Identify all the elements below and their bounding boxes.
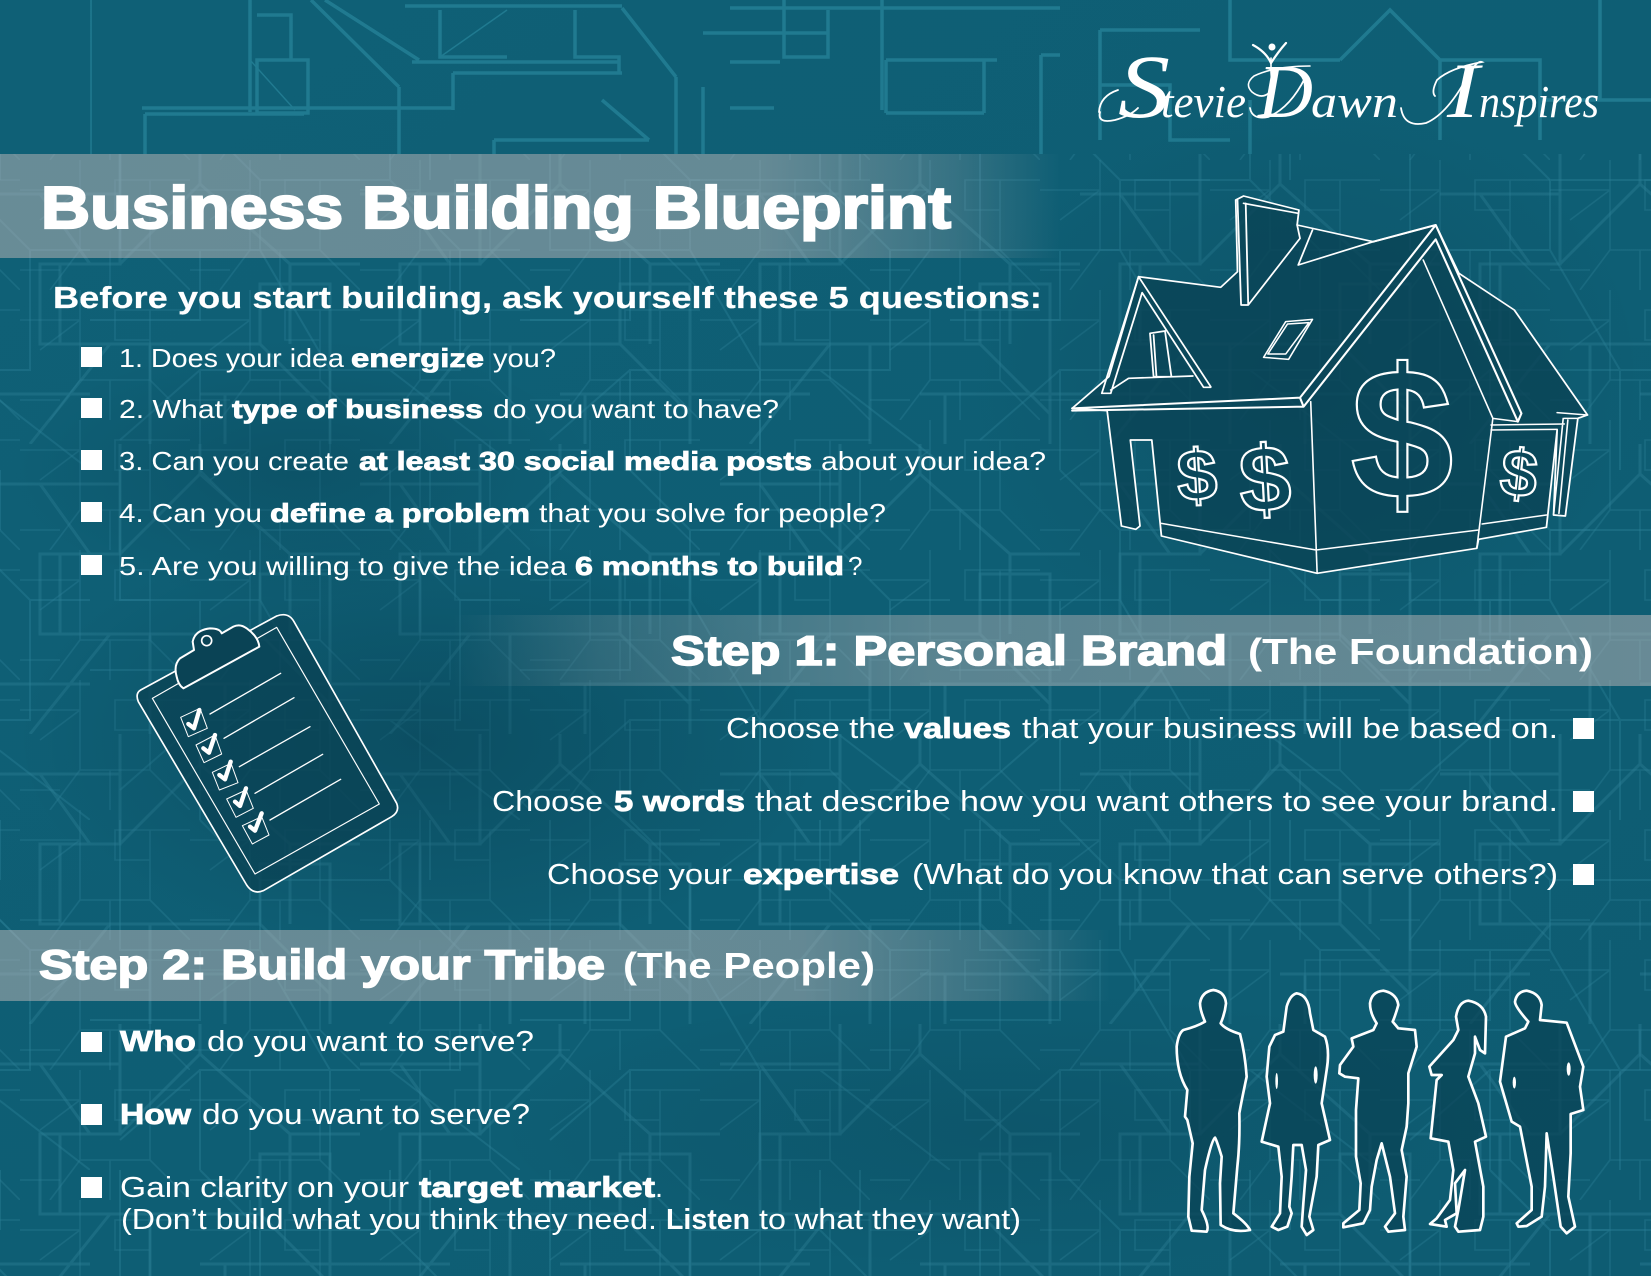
step 2 item: target market: to what they want) xyxy=(759,1204,1021,1236)
step 1 item: 5 words: Choose xyxy=(492,786,603,818)
question 1: you? xyxy=(493,343,556,373)
step 2 item: target market: target market xyxy=(419,1172,655,1204)
step 2 item: how: How xyxy=(120,1099,192,1131)
decorative logo swashes xyxy=(1099,62,1482,124)
step 2 item: who xyxy=(81,1026,534,1058)
step 1 item: expertise: Choose your xyxy=(547,859,732,891)
subheading: five questions: Before you start building, ask yourself these 5 questions: xyxy=(53,280,1042,315)
question 5: 5. Are you willing to give the idea xyxy=(119,551,568,581)
title: Business Building Blueprint xyxy=(41,175,951,241)
logo: Stevie Dawn Inspires xyxy=(1099,38,1599,137)
icon: clipboard checklist xyxy=(137,615,398,892)
step 2 band xyxy=(0,930,1110,1001)
question 5: ? xyxy=(848,551,862,581)
step 1 item: values xyxy=(726,713,1594,745)
step 1 item: values: that your business will be based on. xyxy=(1022,713,1558,745)
icon: large dollar sign: $ xyxy=(1350,331,1454,538)
question 1 xyxy=(81,343,556,373)
step 2 item: target market: . xyxy=(655,1172,663,1204)
step 1 item: values: Choose the xyxy=(726,713,895,745)
title band xyxy=(0,154,1060,258)
step 1 item: 5 words xyxy=(492,786,1594,818)
question 3: 3. Can you create xyxy=(119,446,349,476)
step 2 item: who: do you want to serve? xyxy=(207,1026,534,1058)
person 2 xyxy=(1262,993,1330,1235)
step 1 heading: Step 1: Personal Brand xyxy=(671,627,1227,674)
step 2 item: target market: Listen xyxy=(666,1204,750,1236)
step 2 item: who: Who xyxy=(120,1026,196,1058)
step 2 item: how xyxy=(81,1099,530,1131)
step 1 item: 5 words: that describe how you want others to see your brand. xyxy=(755,786,1558,818)
icon: dollar sign middle: $ xyxy=(1236,426,1294,532)
question 4: 4. Can you xyxy=(119,498,262,528)
question 2: do you want to have? xyxy=(493,394,779,424)
logo: Stevie Dawn Inspires: tevie xyxy=(1161,76,1246,127)
step 2 item: target market: Gain clarity on your xyxy=(120,1172,409,1204)
question 2: type of business xyxy=(232,394,483,424)
step 1 item: expertise: expertise xyxy=(743,859,899,891)
question 2: 2. What xyxy=(119,394,224,424)
step 2 list xyxy=(81,1026,1021,1236)
question 5 xyxy=(81,551,862,581)
question 5: 6 months to build xyxy=(575,551,844,581)
question 3: at least 30 social media posts xyxy=(359,446,812,476)
logo: Stevie Dawn Inspires: I xyxy=(1446,47,1484,134)
icon: dollar sign left: $ xyxy=(1175,435,1219,517)
step 1 band xyxy=(453,615,1651,686)
question list xyxy=(81,343,1046,581)
step 1 item: expertise: (What do you know that can serve others?) xyxy=(912,859,1558,891)
icon: house with dollar signs xyxy=(1072,196,1587,573)
person 4 xyxy=(1429,1001,1486,1232)
logo: Stevie Dawn Inspires: D xyxy=(1257,50,1313,134)
person 1 xyxy=(1177,990,1250,1232)
icon: dancing figure flourish xyxy=(1248,43,1310,96)
step 1 list xyxy=(492,713,1594,891)
question 4: define a problem xyxy=(270,498,530,528)
icon: dollar sign right: $ xyxy=(1497,434,1541,512)
step 1 subheading: (The Foundation) xyxy=(1248,631,1593,672)
step 1 item: 5 words: 5 words xyxy=(614,786,745,818)
logo: Stevie Dawn Inspires: awn xyxy=(1311,76,1398,127)
question 4: that you solve for people? xyxy=(539,498,886,528)
step 2 heading: Step 2: Build your Tribe xyxy=(39,941,605,988)
step 2 item: target market: (Don’t build what you think they need. xyxy=(121,1204,657,1236)
icon: silhouettes of five people xyxy=(1177,990,1583,1235)
question 2 xyxy=(81,394,779,424)
person 3 xyxy=(1339,991,1417,1232)
question 1: 1. Does your idea xyxy=(119,343,345,373)
question 1: energize xyxy=(351,343,484,373)
person 5 xyxy=(1500,991,1583,1233)
step 2 item: target market xyxy=(81,1172,1021,1236)
step 1 item: expertise xyxy=(547,859,1594,891)
question 3 xyxy=(81,446,1046,476)
question 4 xyxy=(81,498,886,528)
question 3: about your idea? xyxy=(821,446,1046,476)
logo: Stevie Dawn Inspires: nspires xyxy=(1479,76,1599,127)
step 1 item: values: values xyxy=(904,713,1011,745)
step 2 subheading: (The People) xyxy=(623,945,875,986)
step 2 item: how: do you want to serve? xyxy=(202,1099,530,1131)
logo: Stevie Dawn Inspires: S xyxy=(1118,38,1170,137)
